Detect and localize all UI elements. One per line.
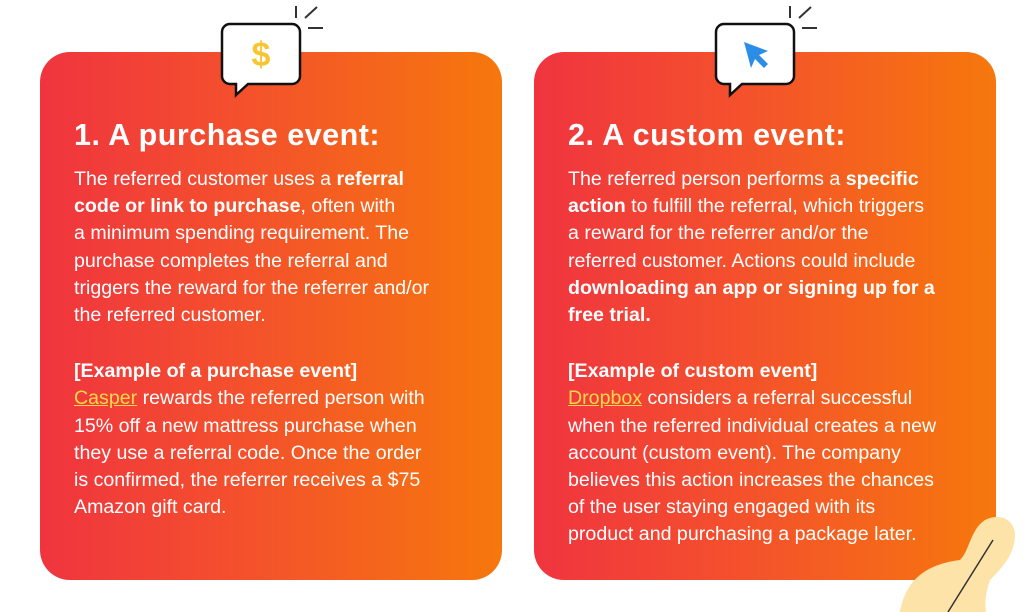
heading: purchase event: 1. A purchase event: bbox=[74, 118, 380, 152]
icon: dollar speech bubble bbox=[220, 6, 323, 98]
text block: custom description: referred customer. Actions could include bbox=[568, 250, 915, 272]
icon: dollar speech bubble: $ bbox=[252, 36, 271, 74]
text block: purchase description: triggers the reward for the referrer and/or bbox=[74, 277, 429, 299]
icon: cursor speech bubble bbox=[714, 6, 817, 98]
text block: purchase example: 15% off a new mattress purchase when bbox=[74, 415, 417, 437]
text block: custom description: a reward for the referrer and/or the bbox=[568, 222, 869, 244]
text block: purchase example bbox=[74, 360, 425, 518]
text block: custom description: free trial. bbox=[568, 304, 651, 326]
text block: custom example: Dropbox considers a referral successful bbox=[568, 387, 912, 409]
text block: purchase example: they use a referral code. Once the order bbox=[74, 442, 421, 464]
text block: purchase description: the referred customer. bbox=[74, 304, 266, 326]
text block: custom example: believes this action increases the chances bbox=[568, 469, 934, 491]
text block: custom example: account (custom event). The company bbox=[568, 442, 901, 464]
text block: purchase example: Amazon gift card. bbox=[74, 496, 226, 518]
text block: custom example: when the referred individual creates a new bbox=[568, 415, 936, 437]
decoration: bottom right blob bbox=[900, 516, 1015, 612]
panel: custom event bbox=[534, 52, 996, 580]
text block: purchase example: Casper rewards the referred person with bbox=[74, 387, 425, 409]
text block: custom description bbox=[568, 168, 935, 326]
text block: custom description: downloading an app or signing up for a bbox=[568, 277, 935, 299]
text block: custom example bbox=[568, 360, 936, 545]
text block: purchase description: a minimum spending requirement. The bbox=[74, 222, 409, 244]
text block: custom description: The referred person performs a specific bbox=[568, 168, 919, 190]
text block: purchase description bbox=[74, 168, 429, 326]
text block: purchase example: [Example of a purchase event] bbox=[74, 360, 357, 382]
text block: purchase example: is confirmed, the referrer receives a $75 bbox=[74, 469, 420, 491]
text block: purchase description: The referred customer uses a referral bbox=[74, 168, 404, 190]
text block: purchase description: purchase completes the referral and bbox=[74, 250, 388, 272]
panel: purchase event bbox=[40, 52, 502, 580]
text block: custom example: product and purchasing a package later. bbox=[568, 523, 917, 545]
text block: custom description: action to fulfill the referral, which triggers bbox=[568, 195, 924, 217]
text block: custom example: [Example of custom event] bbox=[568, 360, 817, 382]
text block: custom example: of the user staying engaged with its bbox=[568, 496, 875, 518]
heading: custom event: 2. A custom event: bbox=[568, 118, 846, 152]
text block: purchase description: code or link to purchase, often with bbox=[74, 195, 395, 217]
